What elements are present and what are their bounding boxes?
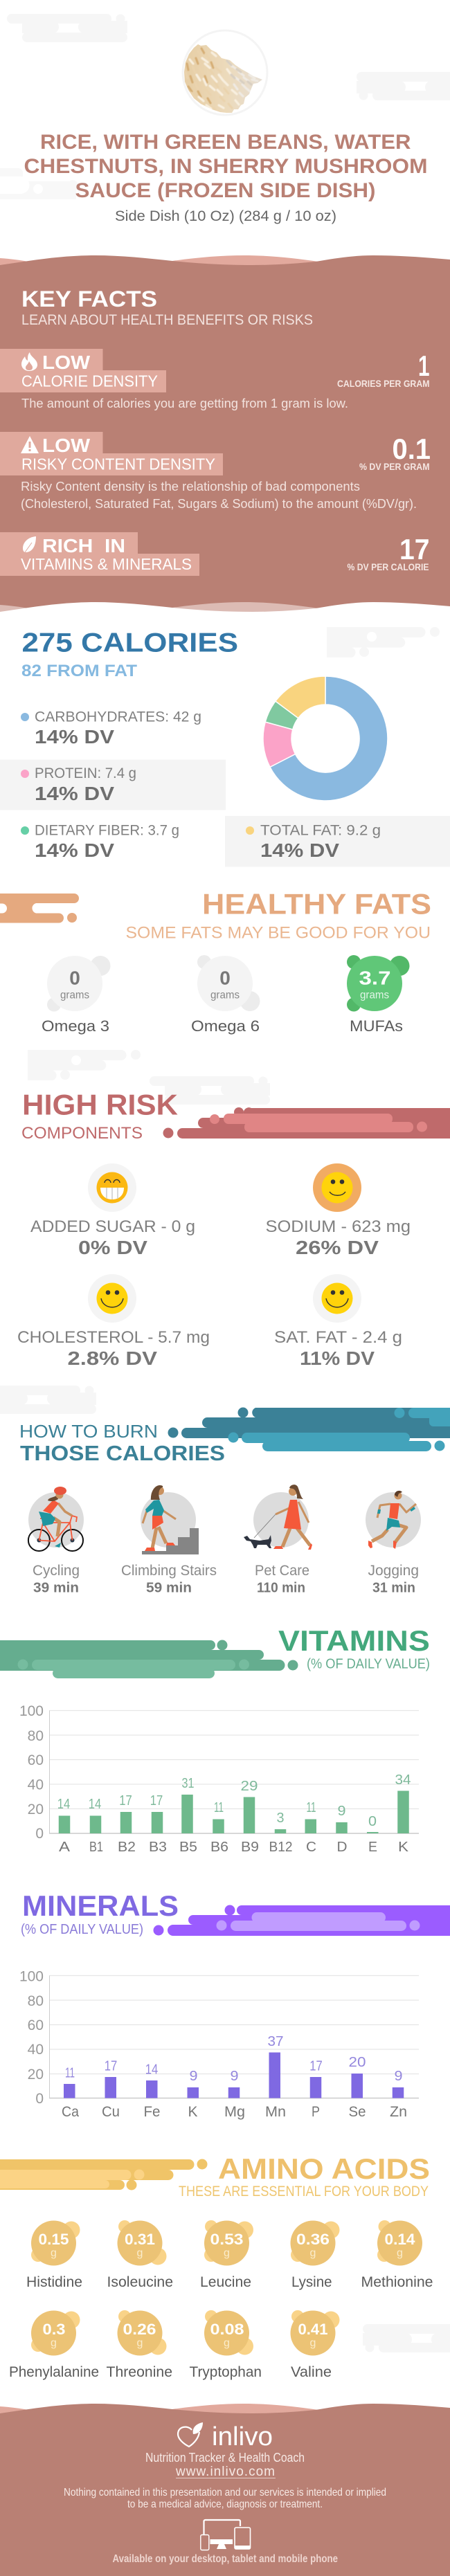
icon: grinning face (97, 1172, 127, 1203)
risk item: saturated fat: 11% DV (300, 1348, 375, 1369)
ribbon decoration (0, 894, 79, 923)
heading: minerals: MINERALS (22, 1889, 179, 1922)
icon: stair climber (142, 1485, 199, 1554)
logo: inlivo: inlivo (212, 2422, 273, 2451)
stat: threonine: g (137, 2337, 143, 2349)
title (24, 131, 428, 202)
activity: climbing stairs (121, 1485, 217, 1596)
stat: valine: Valine (291, 2364, 332, 2380)
bar chart: vitamins: E (368, 1840, 377, 1855)
panel: calories (0, 628, 450, 867)
fact: rich in vitamins and minerals: VITAMINS & MINERALS (21, 555, 192, 573)
title: SAUCE (FROZEN SIDE DISH) (75, 179, 375, 202)
bar chart: vitamins: 60 (28, 1752, 44, 1768)
risk item: added sugar: 0% DV (78, 1237, 147, 1258)
disclaimer: to be a medical advice, diagnosis or treatment. (127, 2498, 323, 2510)
fact: calorie density: 1 (418, 350, 429, 382)
activity: cycling: 39 min (33, 1581, 79, 1596)
stat: lysine: Lysine (291, 2274, 332, 2290)
fact: calorie density: CALORIES PER GRAM (337, 378, 429, 389)
ribbon decoration (154, 1905, 450, 1936)
activity: climbing stairs: Climbing Stairs (121, 1563, 217, 1579)
activity: jogging: 31 min (372, 1581, 415, 1596)
serving size: Side Dish (10 Oz) (284 g / 10 oz) (115, 208, 336, 224)
logo: inlivo (178, 2422, 273, 2451)
icon: smiling face (97, 1283, 127, 1314)
food photo (181, 30, 267, 115)
ribbon decoration (168, 1408, 450, 1451)
activity: jogging (366, 1491, 421, 1596)
stat: tryptophan: Tryptophan (190, 2364, 262, 2380)
panel: vitamins (0, 1624, 430, 1855)
stat: methionine: Methionine (361, 2274, 433, 2290)
fact: risky content density: (Cholesterol, Saturated Fat, Sugars & Sodium) to the amount (%DV/gr). (21, 497, 417, 511)
bar chart: vitamins: 0 (35, 1826, 44, 1842)
risk item: saturated fat (274, 1274, 402, 1369)
stat: isoleucine: Isoleucine (107, 2274, 173, 2290)
risk item: sodium (266, 1163, 411, 1258)
stat: lysine: 0.36 (296, 2231, 330, 2248)
stat: histidine (26, 2220, 82, 2290)
legend: dietary fiber (21, 822, 179, 861)
legend: total fat: TOTAL FAT: 9.2 g (260, 822, 381, 839)
bar chart: vitamins: 11 (214, 1800, 224, 1815)
stat: tryptophan (190, 2310, 262, 2380)
subheading: LEARN ABOUT HEALTH BENEFITS OR RISKS (21, 312, 313, 328)
stat: MUFAs: MUFAs (350, 1017, 403, 1035)
donut chart (263, 676, 388, 801)
stat: leucine: 0.53 (210, 2231, 244, 2248)
bar chart: minerals: Mg (224, 2104, 245, 2120)
ribbon decoration (0, 1640, 298, 1678)
panel: minerals (19, 1889, 450, 2120)
bar chart: vitamins: B6 (210, 1840, 228, 1855)
bar chart: vitamins: 31 (181, 1776, 194, 1791)
bar chart: vitamins: B1 (89, 1840, 103, 1855)
subheading: (% OF DAILY VALUE) (307, 1657, 430, 1672)
panel: key facts (0, 255, 450, 620)
stat: threonine: Threonine (107, 2364, 172, 2380)
stat: lysine (291, 2220, 339, 2290)
bar chart: vitamins: 20 (28, 1802, 44, 1817)
stat: MUFAs: 3.7 (359, 968, 390, 988)
heading: HOW TO BURN (19, 1421, 158, 1442)
stat: MUFAs: grams (360, 990, 389, 1001)
bar chart: minerals: 20 (28, 2067, 44, 2083)
bar chart: vitamins: 0 (368, 1814, 377, 1829)
fact: risky content density: RISKY CONTENT DENSITY (21, 455, 215, 473)
bar chart: vitamins: 9 (338, 1804, 346, 1819)
stat: histidine: Histidine (26, 2274, 82, 2290)
bar chart: vitamins: B2 (118, 1840, 136, 1855)
stat: omega 6: grams (210, 990, 240, 1001)
fact: calorie density: The amount of calories you are getting from 1 gram is low. (21, 397, 348, 410)
fact: calorie density: LOW (42, 352, 91, 373)
heading: key facts: KEY FACTS (21, 287, 157, 311)
bar chart: minerals: 9 (190, 2069, 198, 2084)
bar chart: minerals: 17 (105, 2058, 117, 2074)
ribbon decoration (163, 1107, 450, 1139)
activity: pet care: Pet Care (255, 1563, 309, 1579)
activity: climbing stairs: 59 min (146, 1581, 192, 1596)
risk item: added sugar: ADDED SUGAR - 0 g (30, 1217, 195, 1236)
risk item: cholesterol: CHOLESTEROL - 5.7 mg (17, 1328, 210, 1347)
icon: cyclist (28, 1487, 83, 1551)
icon: flame (21, 352, 37, 371)
stat: methionine: g (397, 2247, 403, 2259)
bar chart: vitamins: 3 (277, 1811, 284, 1826)
bar chart: vitamins: B5 (179, 1840, 197, 1855)
stat: MUFAs (347, 955, 410, 1035)
bar chart: vitamins: B12 (269, 1840, 292, 1855)
bar chart: vitamins: 40 (28, 1777, 44, 1793)
icon: smiling face (321, 1283, 353, 1314)
fact: risky content density: 0.1 (392, 433, 431, 465)
icon: leaf (23, 536, 36, 552)
icon: smiling face (321, 1172, 353, 1203)
availability note: Available on your desktop, tablet and mobile phone (112, 2553, 338, 2565)
panel: healthy fats (0, 887, 431, 1035)
icon: heart with leaf (178, 2422, 203, 2447)
disclaimer (64, 2487, 386, 2510)
bar chart: minerals: 60 (28, 2017, 44, 2033)
panel: footer (0, 2404, 450, 2576)
bar chart: vitamins: B3 (149, 1840, 167, 1855)
stat: threonine (107, 2310, 172, 2380)
bar chart: minerals: 9 (395, 2069, 403, 2084)
bar chart: vitamins (19, 1703, 419, 1855)
subheading: from fat: 82 FROM FAT (21, 662, 137, 680)
legend: carbohydrates: 14% DV (35, 726, 114, 747)
fact: risky content density: Risky Content density is the relationship of bad components (21, 480, 360, 493)
legend: carbohydrates (21, 709, 201, 747)
bar chart: vitamins: 100 (19, 1703, 44, 1719)
bar chart: vitamins: D (336, 1840, 348, 1855)
bar chart: minerals: K (188, 2104, 198, 2120)
bar chart: minerals: 40 (28, 2042, 44, 2058)
risk item: cholesterol: 2.8% DV (68, 1348, 157, 1369)
tagline: Nutrition Tracker & Health Coach (145, 2451, 305, 2465)
stat: leucine: Leucine (200, 2274, 251, 2290)
bar chart: vitamins: C (306, 1840, 316, 1855)
risk item: sodium: 26% DV (296, 1237, 379, 1258)
stat: isoleucine: g (137, 2247, 143, 2259)
bar chart: minerals: 17 (309, 2058, 323, 2074)
stat: histidine: 0.15 (39, 2231, 69, 2248)
stat: omega 3: grams (60, 990, 89, 1001)
bar chart: vitamins: K (398, 1840, 409, 1855)
fact: rich in vitamins and minerals: RICH IN (42, 535, 125, 556)
bar chart: vitamins: 11 (306, 1800, 316, 1815)
stat: omega 6 (191, 955, 260, 1035)
legend: carbohydrates: CARBOHYDRATES: 42 g (35, 709, 201, 725)
bar chart: vitamins: 17 (150, 1793, 163, 1808)
stat: histidine: g (51, 2247, 57, 2259)
subheading: components: COMPONENTS (21, 1124, 143, 1143)
heading: vitamins: VITAMINS (278, 1624, 430, 1657)
stat: valine (291, 2310, 339, 2380)
fact: rich in vitamins and minerals: % DV PER CALORIE (348, 561, 429, 572)
stat: phenylalanine: g (51, 2337, 57, 2349)
bar chart: minerals: 9 (230, 2069, 238, 2084)
ribbon decoration (0, 2159, 208, 2190)
stat: leucine: g (224, 2247, 230, 2259)
title: RICE, WITH GREEN BEANS, WATER (40, 131, 411, 154)
heading: amino acids: AMINO ACIDS (218, 2152, 430, 2185)
activity: cycling (28, 1487, 84, 1596)
stat: omega 6: Omega 6 (191, 1017, 260, 1035)
stat: valine: g (310, 2337, 316, 2349)
stat: phenylalanine: Phenylalanine (9, 2364, 99, 2380)
stat: valine: 0.41 (298, 2321, 328, 2338)
bar chart: vitamins: 80 (28, 1728, 44, 1744)
fact: calorie density (0, 349, 429, 410)
disclaimer: Nothing contained in this presentation and our services is intended or implied (64, 2487, 386, 2498)
fact: rich in vitamins and minerals: 17 (399, 533, 429, 565)
bar chart: minerals: 0 (35, 2091, 44, 2107)
activity: pet care: 110 min (257, 1581, 305, 1596)
legend: protein (21, 765, 136, 804)
bar chart: minerals: 37 (267, 2034, 284, 2049)
bar chart: minerals (19, 1968, 419, 2120)
panel: amino acids (0, 2152, 433, 2380)
panel: high risk components (17, 1088, 450, 1369)
bar chart: minerals: Fe (144, 2104, 161, 2120)
legend: protein: PROTEIN: 7.4 g (35, 765, 136, 781)
icon: dog walker (244, 1485, 312, 1550)
heading: high risk: HIGH RISK (22, 1088, 178, 1121)
bar chart: vitamins: 29 (241, 1779, 258, 1794)
bar chart: minerals: 20 (349, 2055, 366, 2070)
bar chart: minerals: Cu (102, 2104, 120, 2120)
risk item: sodium: SODIUM - 623 mg (266, 1217, 411, 1236)
stat: phenylalanine (9, 2310, 99, 2380)
legend: dietary fiber: DIETARY FIBER: 3.7 g (35, 822, 179, 839)
stat: omega 3: Omega 3 (42, 1017, 109, 1035)
bar chart: vitamins: 14 (89, 1797, 101, 1812)
bar chart: vitamins: 17 (119, 1793, 132, 1808)
activity: cycling: Cycling (33, 1563, 80, 1579)
bar chart: minerals: Ca (62, 2104, 79, 2120)
bar chart: vitamins: 14 (57, 1797, 70, 1812)
icon: jogger (368, 1491, 416, 1549)
legend: dietary fiber: 14% DV (35, 840, 114, 861)
fact: rich in vitamins and minerals (0, 532, 429, 576)
header: food photo and title (24, 30, 428, 224)
bar chart: minerals: 80 (28, 1993, 44, 2009)
icon: warning (21, 436, 39, 453)
stat: omega 3 (42, 956, 111, 1035)
panel: how to burn those calories: THOSE CALORIES (20, 1441, 225, 1465)
stat: isoleucine: 0.31 (125, 2231, 155, 2248)
fact: risky content density: LOW (42, 435, 91, 456)
risk item: cholesterol (17, 1274, 210, 1369)
stat: methionine (361, 2220, 433, 2290)
bar chart: minerals: 11 (65, 2065, 75, 2080)
risk item: added sugar (30, 1163, 195, 1258)
bar chart: minerals: P (312, 2104, 320, 2120)
title: CHESTNUTS, IN SHERRY MUSHROOM (24, 155, 428, 178)
stat: phenylalanine: 0.3 (43, 2321, 65, 2338)
heading: calories: 275 CALORIES (22, 628, 238, 657)
panel: how to burn those calories (19, 1408, 450, 1596)
stat: methionine: 0.14 (385, 2231, 415, 2248)
subheading: (% OF DAILY VALUE) (21, 1922, 143, 1937)
legend: total fat (246, 822, 381, 861)
bar chart: minerals: Se (349, 2104, 366, 2120)
activity: jogging: Jogging (368, 1563, 419, 1579)
icon: devices (201, 2520, 251, 2550)
bar chart: minerals: Mn (265, 2104, 286, 2120)
stat: threonine: 0.26 (123, 2321, 156, 2338)
stat: tryptophan: 0.08 (210, 2321, 244, 2338)
legend: total fat: 14% DV (260, 840, 339, 861)
bar chart: vitamins: B9 (241, 1840, 259, 1855)
fact: calorie density: CALORIE DENSITY (21, 372, 158, 390)
bar chart: minerals: 100 (19, 1968, 44, 1985)
legend: protein: 14% DV (35, 783, 114, 804)
heading: healthy fats: HEALTHY FATS (202, 887, 431, 920)
stat: tryptophan: g (224, 2337, 230, 2349)
fact: risky content density (0, 432, 431, 511)
bar chart: vitamins: A (59, 1840, 71, 1855)
stat: isoleucine (107, 2220, 173, 2290)
stat: omega 3: 0 (69, 968, 80, 988)
bar chart: vitamins: 34 (395, 1772, 411, 1788)
bar chart: minerals: Zn (390, 2104, 407, 2120)
subheading: SOME FATS MAY BE GOOD FOR YOU (126, 923, 431, 943)
risk item: saturated fat: SAT. FAT - 2.4 g (274, 1328, 402, 1347)
fact: risky content density: % DV PER GRAM (359, 461, 429, 472)
stat: leucine (200, 2220, 253, 2290)
activity: pet care (244, 1485, 312, 1596)
bar chart: minerals: 14 (145, 2062, 158, 2078)
stat: lysine: g (310, 2247, 316, 2259)
website link: www.inlivo.com (175, 2465, 275, 2479)
stat: omega 6: 0 (219, 968, 231, 988)
